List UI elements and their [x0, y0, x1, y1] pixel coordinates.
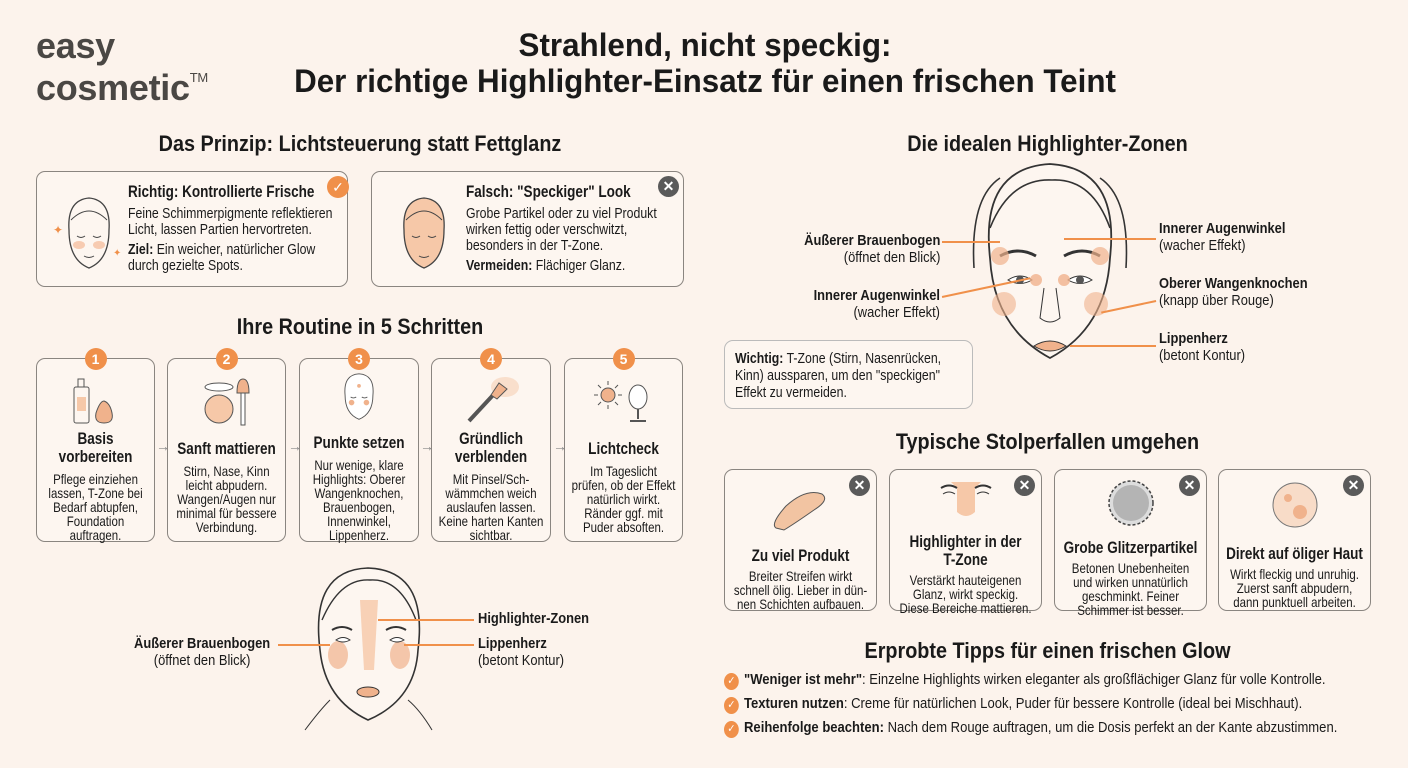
- pitfall 1: Breiter Streifen wirkt: [749, 568, 852, 584]
- pitfall 4: ✕: [1348, 477, 1359, 493]
- heading: Das Prinzip: Das Prinzip: Lichtsteuerung statt Fettglanz: [159, 131, 561, 156]
- step 2: Sanft mattieren: [177, 440, 276, 458]
- card: richtig: durch gezielte Spots.: [128, 257, 243, 274]
- step 3: [299, 358, 419, 542]
- step 2: 2: [223, 351, 230, 367]
- callout: Wichtig: [724, 340, 973, 409]
- pitfall 3: und wirken unnatürlich: [1073, 574, 1188, 590]
- label: Äußerer Brauenbogen: Äußerer Brauenbogen: [804, 232, 940, 249]
- step 4: sichtbar.: [470, 527, 512, 543]
- label: Lippenherz: [1159, 330, 1245, 364]
- step 5: Puder absoften.: [583, 519, 664, 535]
- step 4: [431, 358, 551, 542]
- label: Lippenherz: (betont Kontur): [1159, 347, 1245, 364]
- title: Strahlend, nicht speckig:: [519, 27, 891, 63]
- card: falsch: wirken fettig oder verschwitzt,: [466, 221, 627, 238]
- step 5: Lichtcheck: [588, 440, 659, 458]
- label: Lippenherz: Lippenherz: [1159, 330, 1228, 347]
- callout: Wichtig: Wichtig: T-Zone (Stirn, Nasenrücken,: [735, 350, 941, 367]
- pitfall 3: Grobe Glitzerpartikel: [1064, 539, 1197, 557]
- step 3: Highlights: Oberer: [313, 471, 405, 487]
- arrow: →: [156, 438, 170, 454]
- tips list: ✓: [727, 723, 735, 735]
- logo: easy: [36, 25, 115, 66]
- step 1: 1: [92, 351, 99, 367]
- step 5: Im Tageslicht: [590, 463, 657, 479]
- title: Der richtige Highlighter-Einsatz für einen frischen Teint: [294, 63, 1116, 99]
- tips list: Reihenfolge beachten: Nach dem Rouge auftragen, um die Dosis perfekt an der Kante abzustimmen.: [744, 719, 1337, 736]
- label: Innerer Augenwinkel right: [1159, 220, 1285, 254]
- step 2: Wangen/Augen nur: [177, 491, 276, 507]
- tips list: Texturen nutzen: Creme für natürlichen Look, Puder für bessere Kontrolle (ideal bei Mischhaut).: [744, 695, 1302, 712]
- tips list: ✓: [727, 699, 735, 711]
- pitfall 2: ✕: [1019, 477, 1030, 493]
- label: Lippenherz (bottom): [478, 635, 564, 669]
- pitfall 1: Zu viel Produkt: [752, 547, 849, 565]
- label: Oberer Wangenknochen: (knapp über Rouge): [1159, 292, 1274, 309]
- icon: check: [327, 176, 349, 198]
- tips list: ✓: [727, 675, 735, 687]
- logo: [36, 25, 208, 108]
- card: falsch: Grobe Partikel oder zu viel Produkt: [466, 205, 657, 222]
- tips list: "Weniger ist mehr": Einzelne Highlights wirken eleganter als großflächiger Glanz für volle Kontrolle.: [744, 671, 1326, 688]
- step 3: Wangenknochen,: [315, 485, 403, 501]
- step 4: Gründlich: [459, 430, 523, 448]
- text: →: [288, 438, 302, 454]
- pitfall 4: Wirkt fleckig und unruhig.: [1230, 566, 1359, 582]
- icon: swatch: [774, 492, 826, 530]
- icon: sun mirror: [594, 381, 648, 422]
- icon: face glow: [53, 197, 121, 269]
- step 3: Nur wenige, klare: [314, 457, 404, 473]
- step 2: Stirn, Nase, Kinn: [183, 463, 270, 479]
- card: richtig: Feine Schimmerpigmente reflektieren: [128, 205, 332, 222]
- step 4: Keine harten Kanten: [439, 513, 543, 529]
- label: Innerer Augenwinkel left: (wacher Effekt): [853, 304, 940, 321]
- pitfall 3: Betonen Unebenheiten: [1072, 560, 1189, 576]
- card: richtig: Licht, lassen Partien hervortreten.: [128, 221, 312, 238]
- label: Oberer Wangenknochen: Oberer Wangenknochen: [1159, 275, 1308, 292]
- pitfall 4: dann punktuell arbeiten.: [1233, 594, 1356, 610]
- step 5: prüfen, ob der Effekt: [572, 477, 675, 493]
- step 5: Ränder ggf. mit: [584, 505, 663, 521]
- illustration: main face: [972, 163, 1128, 359]
- logo: cosmeticTM: [36, 67, 208, 108]
- heading: Stolperfallen: Typische Stolperfallen umgehen: [896, 429, 1199, 454]
- label: Äußerer Brauenbogen (bottom): Äußerer Brauenbogen: [134, 635, 270, 652]
- pitfall 1: ✕: [854, 477, 865, 493]
- heading: ideale Zonen: Die idealen Highlighter-Zonen: [907, 131, 1188, 156]
- label: Äußerer Brauenbogen: (öffnet den Blick): [843, 249, 940, 266]
- card: richtig: [36, 171, 348, 287]
- icon: face glow: ✦: [113, 248, 121, 259]
- tips list: [724, 671, 1337, 738]
- card: falsch: Falsch: "Speckiger" Look: [466, 183, 631, 201]
- pitfall 1: schnell ölig. Lieber in dün-: [734, 582, 867, 598]
- icon: bottle sponge: [74, 378, 113, 424]
- step 1: Basis: [77, 430, 114, 448]
- step 1: Bedarf abtupfen,: [53, 499, 138, 515]
- step 4: verblenden: [455, 448, 527, 466]
- illustration: bottom face: [304, 567, 432, 730]
- icon: x: ✕: [663, 178, 674, 194]
- icon: face dots: [344, 373, 374, 420]
- pitfall 3: [1054, 469, 1207, 611]
- label: Oberer Wangenknochen: [1159, 275, 1308, 309]
- icon: x: [658, 176, 679, 197]
- text: →: [420, 438, 434, 454]
- text: →: [553, 438, 567, 454]
- pitfall 4: [1218, 469, 1371, 611]
- label: Lippenherz (bottom): (betont Kontur): [478, 652, 564, 669]
- label: Innerer Augenwinkel right: Innerer Augenwinkel: [1159, 220, 1285, 237]
- step 1: vorbereiten: [59, 448, 132, 466]
- step 2: Verbindung.: [196, 519, 257, 535]
- label: Innerer Augenwinkel right: (wacher Effekt): [1159, 237, 1246, 254]
- step 1: Foundation: [67, 513, 124, 529]
- step 2: leicht abpudern.: [186, 477, 267, 493]
- label: Äußerer Brauenbogen: [804, 232, 940, 266]
- pitfall 2: [889, 469, 1042, 611]
- label: Innerer Augenwinkel left: Innerer Augenwinkel: [814, 287, 940, 304]
- heading: Routine: Ihre Routine in 5 Schritten: [237, 314, 483, 339]
- card: richtig: Richtig: Kontrollierte Frische: [128, 183, 314, 201]
- step 3: 3: [355, 351, 363, 367]
- label: Lippenherz (bottom): Lippenherz: [478, 635, 547, 652]
- step 3: Brauenbogen,: [323, 499, 395, 515]
- pitfall 4: Direkt auf öliger Haut: [1226, 545, 1363, 563]
- callout: Wichtig: Kinn) aussparen, um den "speckigen": [735, 367, 940, 384]
- icon: powder brush: [204, 378, 250, 426]
- pitfall 1: nen Schichten aufbauen.: [737, 596, 864, 612]
- step 2: minimal für bessere: [176, 505, 277, 521]
- pitfall 2: Highlighter in der: [910, 533, 1022, 551]
- step 5: 5: [620, 351, 627, 367]
- label: Äußerer Brauenbogen (bottom): (öffnet den Blick): [154, 652, 250, 669]
- step 4: Mit Pinsel/Sch-: [453, 471, 529, 487]
- pitfall 1: [724, 469, 877, 611]
- pitfall 3: ✕: [1184, 477, 1195, 493]
- icon: t-zone nose: [940, 482, 992, 516]
- icon: glitter: [1108, 480, 1154, 526]
- step 4: 4: [487, 351, 495, 367]
- step 5: natürlich wirkt.: [587, 491, 660, 507]
- step 3: Punkte setzen: [314, 434, 405, 452]
- callout: Wichtig: Effekt zu vermeiden.: [735, 384, 847, 401]
- step 4: wämmchen weich: [445, 485, 537, 501]
- heading: Tipps: Erprobte Tipps für einen frischen Glow: [865, 638, 1230, 663]
- card: falsch: besonders in der T-Zone.: [466, 237, 603, 254]
- pitfall 2: Verstärkt hauteigenen: [910, 572, 1021, 588]
- title: [294, 27, 1116, 99]
- step 3: Lippenherz.: [329, 527, 389, 543]
- step 3: Innenwinkel,: [327, 513, 391, 529]
- card: falsch: Vermeiden: Flächiger Glanz.: [466, 257, 625, 274]
- step 1: Pflege einziehen: [53, 471, 138, 487]
- pitfall 3: geschminkt. Feiner: [1082, 588, 1179, 604]
- icon: oily skin: [1272, 482, 1318, 528]
- step 4: auslaufen lassen.: [446, 499, 536, 515]
- label: Äußerer Brauenbogen (bottom): [134, 635, 270, 669]
- icon: brush: [468, 377, 519, 422]
- card: falsch: [371, 171, 684, 287]
- label: Innerer Augenwinkel left: [814, 287, 940, 321]
- pitfall 2: T-Zone: [943, 551, 988, 569]
- step 1: lassen, T-Zone bei: [48, 485, 143, 501]
- step 1: auftragen.: [70, 527, 121, 543]
- card: richtig: Ziel: Ein weicher, natürlicher Glow: [128, 241, 315, 258]
- pitfall 2: Diese Bereiche mattieren.: [899, 600, 1032, 616]
- step 1: [36, 358, 155, 542]
- pitfall 4: Zuerst sanft abpudern,: [1237, 580, 1352, 596]
- step 2: [167, 358, 286, 542]
- icon: face oily: [403, 197, 445, 269]
- pitfall 2: Glanz, wirkt speckig.: [913, 586, 1018, 602]
- icon: check: ✓: [332, 179, 344, 195]
- step 5: [564, 358, 683, 542]
- icon: face glow: ✦: [53, 223, 63, 237]
- pitfall 3: Schimmer ist besser.: [1077, 602, 1184, 618]
- label: Highlighter-Zonen: Highlighter-Zonen: [478, 610, 589, 627]
